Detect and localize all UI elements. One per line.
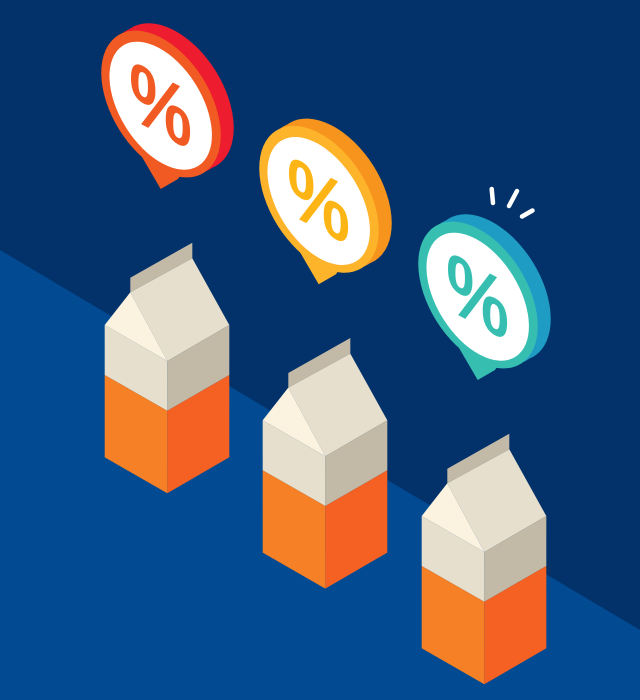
speech bubble: teal percent bbox=[394, 193, 575, 390]
milk carton: right bbox=[422, 434, 546, 684]
speech bubble: red percent bbox=[77, 2, 258, 199]
icon: sparkle lines bbox=[492, 189, 532, 216]
speech bubble: teal percent: % bbox=[446, 232, 509, 361]
background: blue diagonal band bbox=[0, 250, 640, 700]
milk carton: left bbox=[105, 243, 229, 493]
milk carton: middle bbox=[263, 338, 387, 589]
speech bubble: red percent: % bbox=[129, 41, 192, 170]
speech bubble: yellow percent bbox=[235, 97, 416, 294]
speech bubble: yellow percent: % bbox=[287, 137, 350, 265]
